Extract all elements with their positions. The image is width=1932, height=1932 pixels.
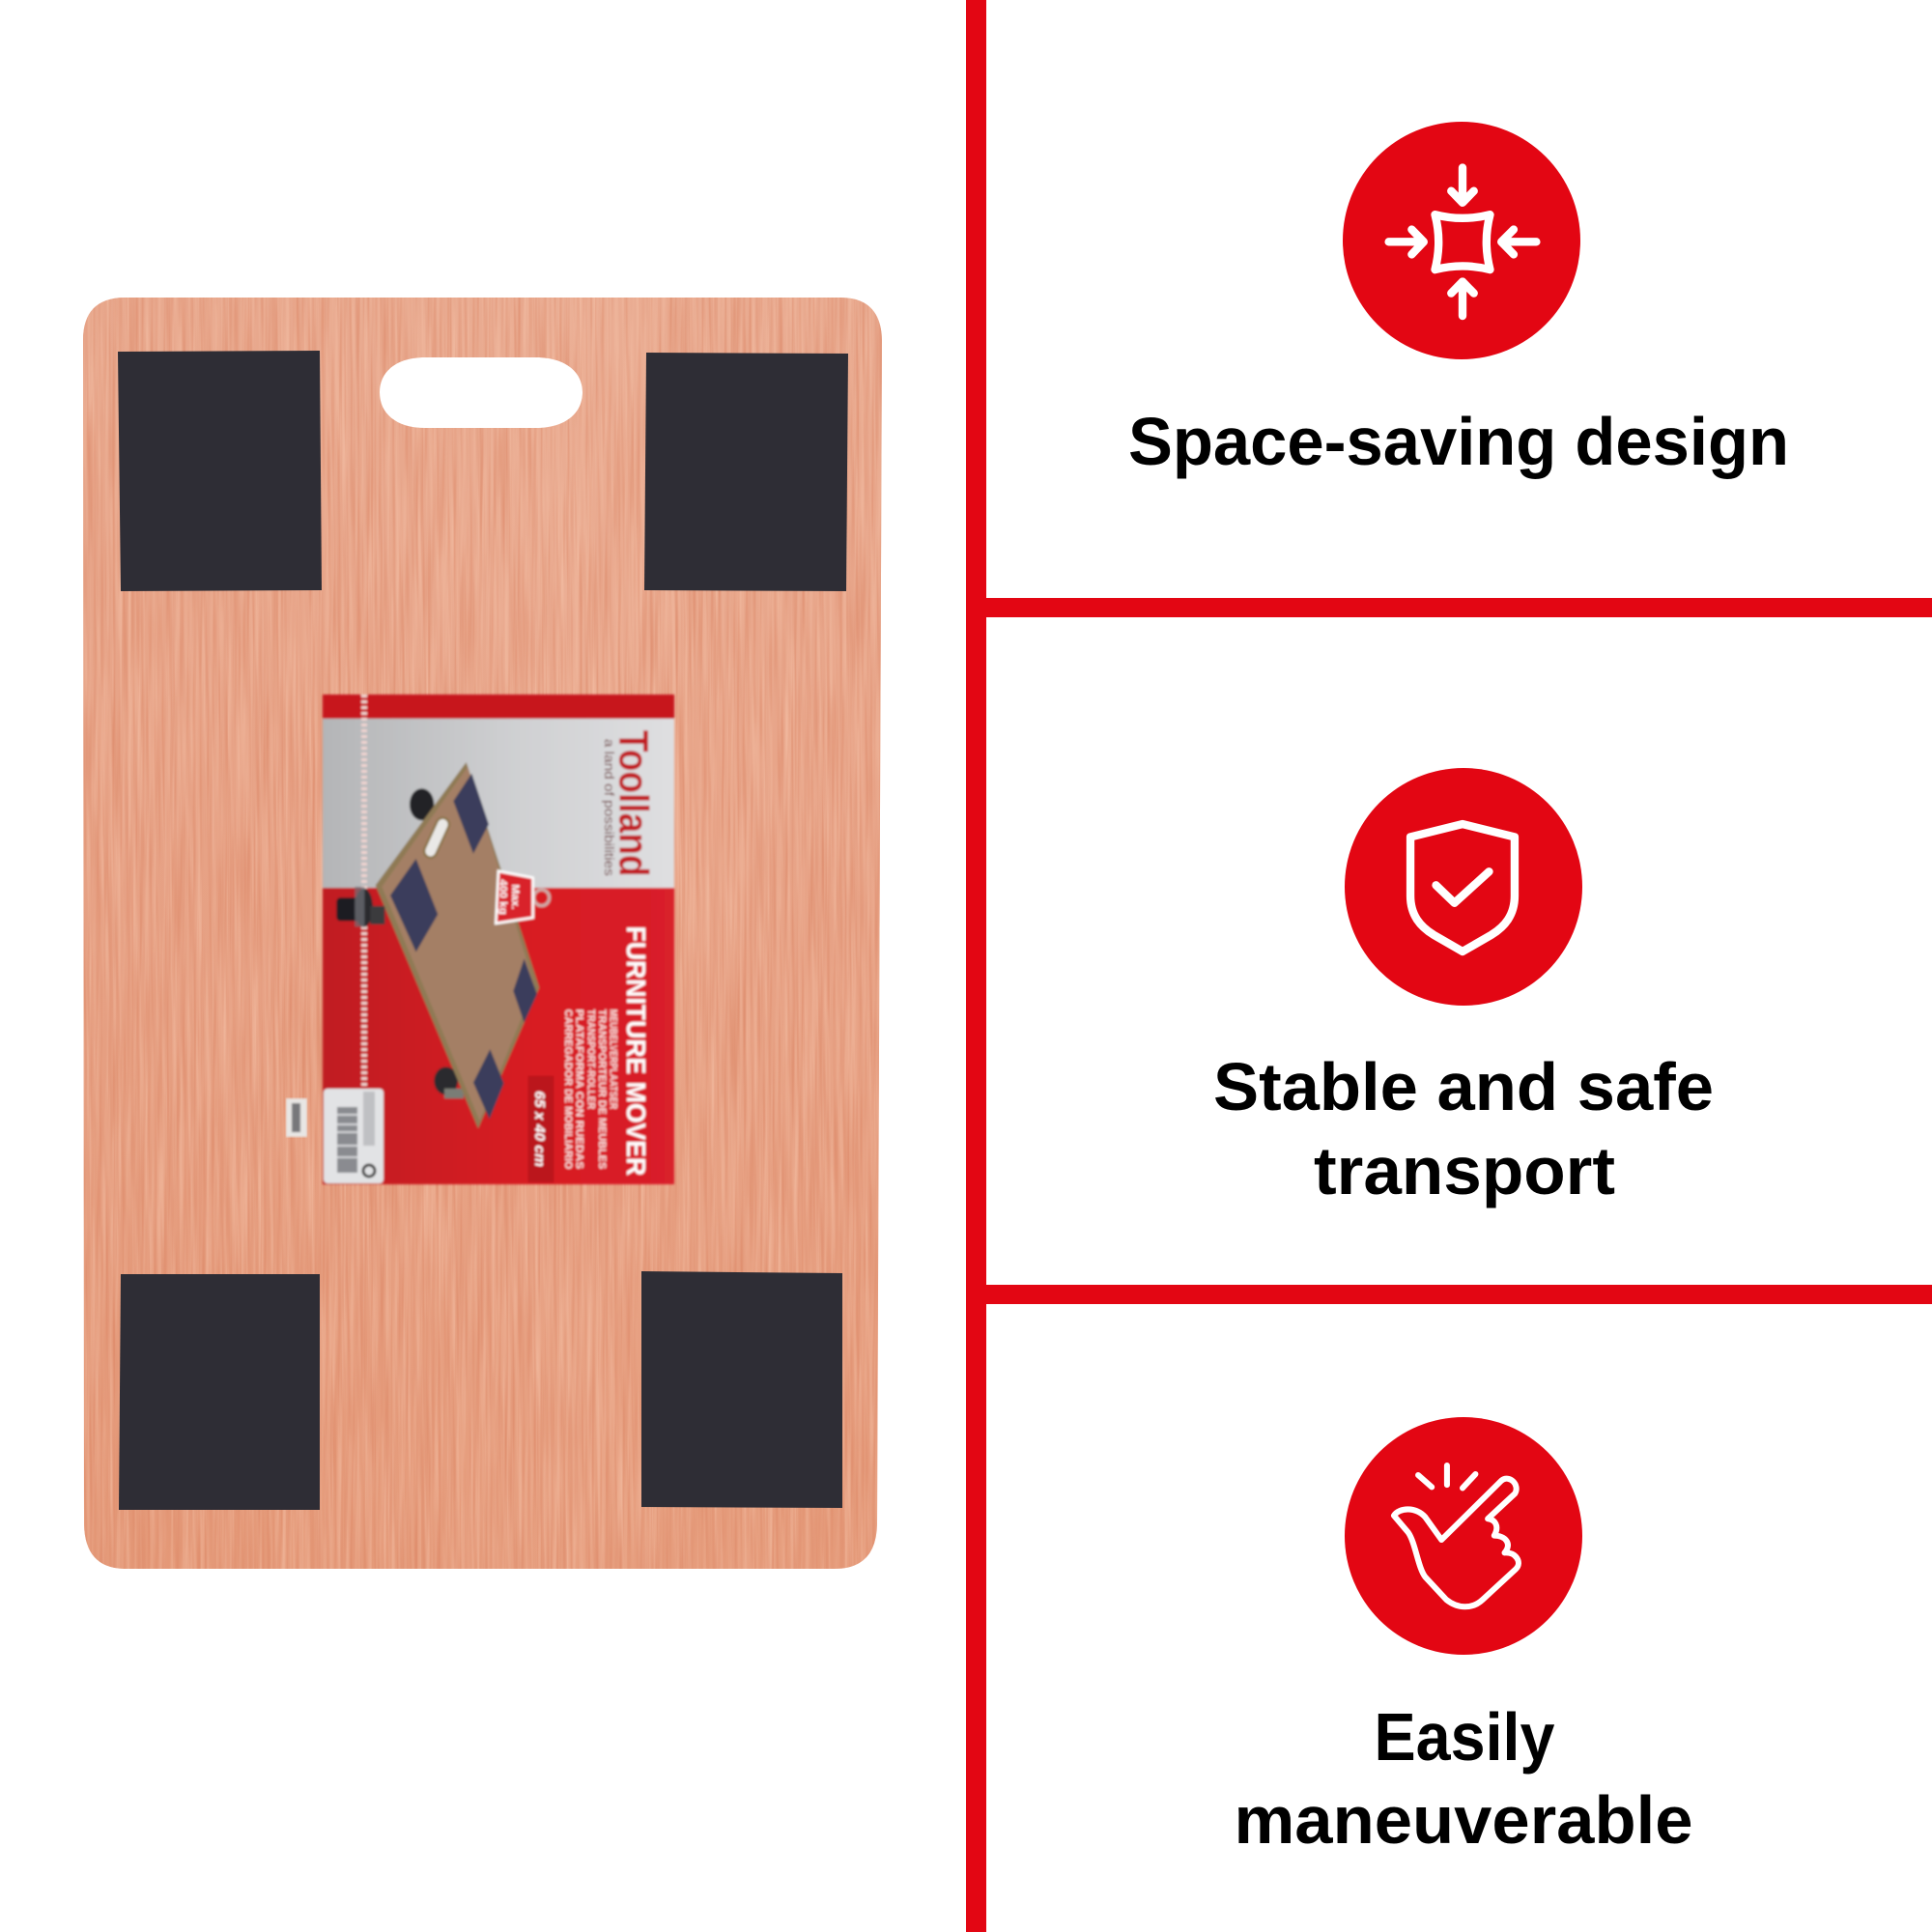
max weight sign: 400 kg bbox=[497, 879, 508, 915]
anti-slip pad: bottom left bbox=[119, 1274, 320, 1510]
dimensions badge bbox=[528, 1076, 554, 1182]
wheel: bottom bbox=[434, 1066, 464, 1098]
max weight sign bbox=[496, 871, 550, 923]
horizontal red divider: lower bbox=[985, 1285, 1932, 1304]
anti-slip pad: top right bbox=[644, 353, 848, 591]
miniature pad 2 bbox=[390, 859, 438, 952]
heading: Space-saving design bbox=[1128, 404, 1789, 479]
wooden board with handle cutout bbox=[77, 290, 889, 1575]
small white sticker on board bbox=[286, 1098, 307, 1137]
label red area bbox=[323, 888, 674, 1184]
label grey area bbox=[323, 719, 674, 888]
translated product names: MEUBELVERPLAATSER bbox=[608, 1009, 618, 1109]
horizontal red divider: upper bbox=[985, 598, 1932, 617]
panel: easily maneuverable bbox=[1235, 1417, 1692, 1858]
icon: snapping hand in red circle bbox=[1345, 1417, 1582, 1655]
icon: shield with check in red circle bbox=[1345, 768, 1582, 1006]
icon: compress arrows in red circle bbox=[1343, 122, 1580, 359]
miniature board bbox=[376, 762, 539, 1128]
dimensions badge: 65 x 40 cm bbox=[531, 1091, 548, 1167]
wheel: left bbox=[336, 887, 384, 927]
heading: transport bbox=[1314, 1133, 1615, 1208]
miniature pad 1 bbox=[453, 774, 489, 854]
heading: Stable and safe bbox=[1213, 1049, 1714, 1124]
miniature handle bbox=[431, 824, 442, 851]
panel: space-saving design bbox=[1128, 122, 1789, 479]
heading: maneuverable bbox=[1235, 1782, 1692, 1858]
label top red strip bbox=[323, 695, 674, 720]
translated product names: PLATAFORMA CON RUEDAS bbox=[574, 1009, 584, 1170]
translated product names: CARREGADOR DE MOBILIARIO bbox=[562, 1009, 574, 1170]
product title: FURNITURE MOVER bbox=[620, 926, 651, 1176]
perforation line bbox=[361, 695, 367, 1087]
barcode sticker bbox=[324, 1089, 384, 1183]
anti-slip pad: top left bbox=[118, 351, 322, 591]
heading: Easily bbox=[1374, 1699, 1555, 1775]
brand name: Toolland bbox=[611, 730, 656, 877]
max weight sign: Max. bbox=[509, 885, 521, 910]
panel: product photo of wooden furniture mover bbox=[77, 290, 889, 1575]
vertical red divider bbox=[966, 0, 986, 1932]
translated product names bbox=[562, 1009, 618, 1170]
packaging label bbox=[323, 695, 674, 1184]
miniature pad 3 bbox=[513, 958, 537, 1023]
miniature pad 4 bbox=[473, 1049, 504, 1120]
brand tagline: a land of possibilities bbox=[601, 739, 616, 876]
translated product names: TRANSPORTEUR DE MEUBLES bbox=[596, 1009, 608, 1170]
panel: stable and safe transport bbox=[1213, 768, 1714, 1208]
translated product names: TRANSPORT-ROLLER bbox=[584, 1009, 596, 1109]
anti-slip pad: bottom right bbox=[641, 1271, 842, 1508]
label product picture and text bbox=[336, 730, 656, 1182]
wheel: back top bbox=[410, 788, 434, 820]
